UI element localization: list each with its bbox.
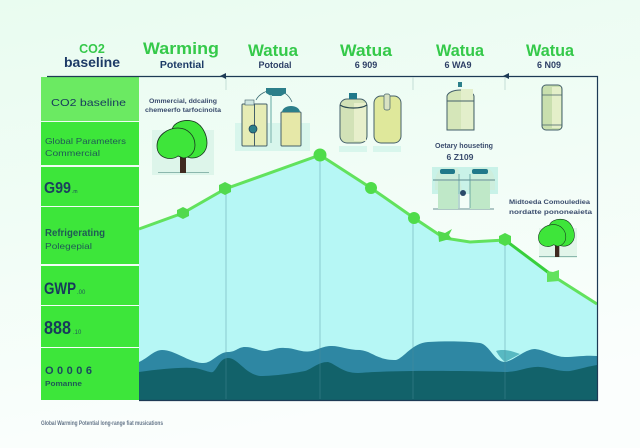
row: 0006: Pomanne	[45, 379, 82, 388]
heading: column 5: Watua	[436, 41, 485, 60]
heading: column 6: Watua	[526, 41, 575, 60]
footnote: Global Warming Potential long-range fiat musications	[41, 421, 164, 427]
row: Refrigerating: Polegepial	[45, 241, 92, 251]
annotation: right caption	[509, 199, 592, 216]
icon: slim tank	[542, 85, 562, 130]
row: Refrigerating: Refrigerating	[45, 227, 105, 239]
row: Global: Global Parameters	[45, 136, 126, 146]
heading: CO2 baseline: CO2	[79, 42, 105, 56]
icon: tall tank	[447, 82, 474, 130]
trend line with markers	[139, 148, 597, 304]
area under line	[139, 155, 597, 400]
row: GWP: .m	[72, 189, 78, 195]
annotation: right caption: Midtoeda Comoulediea	[509, 199, 590, 206]
heading: column 3: Watua	[248, 41, 299, 60]
heading: column 5	[436, 41, 485, 70]
row: Global: Commercial	[45, 148, 100, 158]
heading: column 4: 6 909	[355, 60, 377, 70]
icon: paired tanks	[432, 167, 498, 209]
heading: CO2 baseline	[64, 42, 120, 70]
heading: column 5: 6 WA9	[444, 60, 472, 70]
row: 888	[41, 306, 139, 347]
heading: column 6	[526, 41, 575, 70]
row: Refrigerating	[41, 207, 139, 264]
heading: column 4: Watua	[340, 41, 393, 60]
row: GWP value	[41, 266, 139, 305]
annotation: middle caption: Oetary houseting	[435, 143, 493, 150]
icon: two cylinders	[339, 93, 401, 152]
wave highlight	[496, 350, 520, 362]
chart: area and waves	[139, 155, 597, 400]
heading: column 3	[248, 41, 299, 70]
heading: CO2 baseline: baseline	[64, 54, 120, 70]
row: GWP: G99	[44, 180, 71, 197]
row: 0006: O0006	[45, 365, 92, 377]
icon: connected tanks	[235, 88, 310, 151]
icon: tree left	[152, 120, 214, 175]
heading: Warming Potential	[143, 40, 219, 71]
annotation: right caption: nordatte pononeaieta	[509, 209, 592, 216]
row: Global	[41, 122, 139, 165]
column headings	[64, 40, 575, 71]
icon: tree right	[538, 219, 577, 258]
mid wave	[139, 341, 597, 400]
annotation: tree caption: Ommercial, ddcaling	[149, 98, 217, 105]
heading: Warming Potential: Potential	[160, 59, 204, 71]
left category column	[41, 77, 139, 400]
row: GWP value: GWP	[44, 279, 76, 298]
row: 0006	[41, 348, 139, 400]
heading: column 6: 6 N09	[537, 60, 561, 70]
annotation: middle caption	[435, 143, 493, 162]
row: CO2 baseline: CO2 baseline	[51, 97, 126, 109]
row: GWP value: .00	[77, 290, 86, 296]
row: 888: .10	[73, 330, 82, 336]
heading: column 3: Potodal	[258, 60, 292, 70]
vertical guide lines	[226, 155, 505, 399]
front wave	[139, 358, 597, 400]
heading: Warming Potential: Warming	[143, 40, 219, 58]
row: 888: 888	[44, 317, 71, 338]
heading: column 4	[340, 41, 393, 70]
annotation: tree caption	[145, 98, 221, 114]
row: GWP	[41, 167, 139, 206]
annotation: middle caption: 6 Z109	[446, 153, 474, 162]
annotation: tree caption: chemeerfo tarfocinoita	[145, 107, 221, 114]
row: CO2 baseline	[41, 77, 139, 121]
chart frame with arrows	[47, 73, 598, 400]
